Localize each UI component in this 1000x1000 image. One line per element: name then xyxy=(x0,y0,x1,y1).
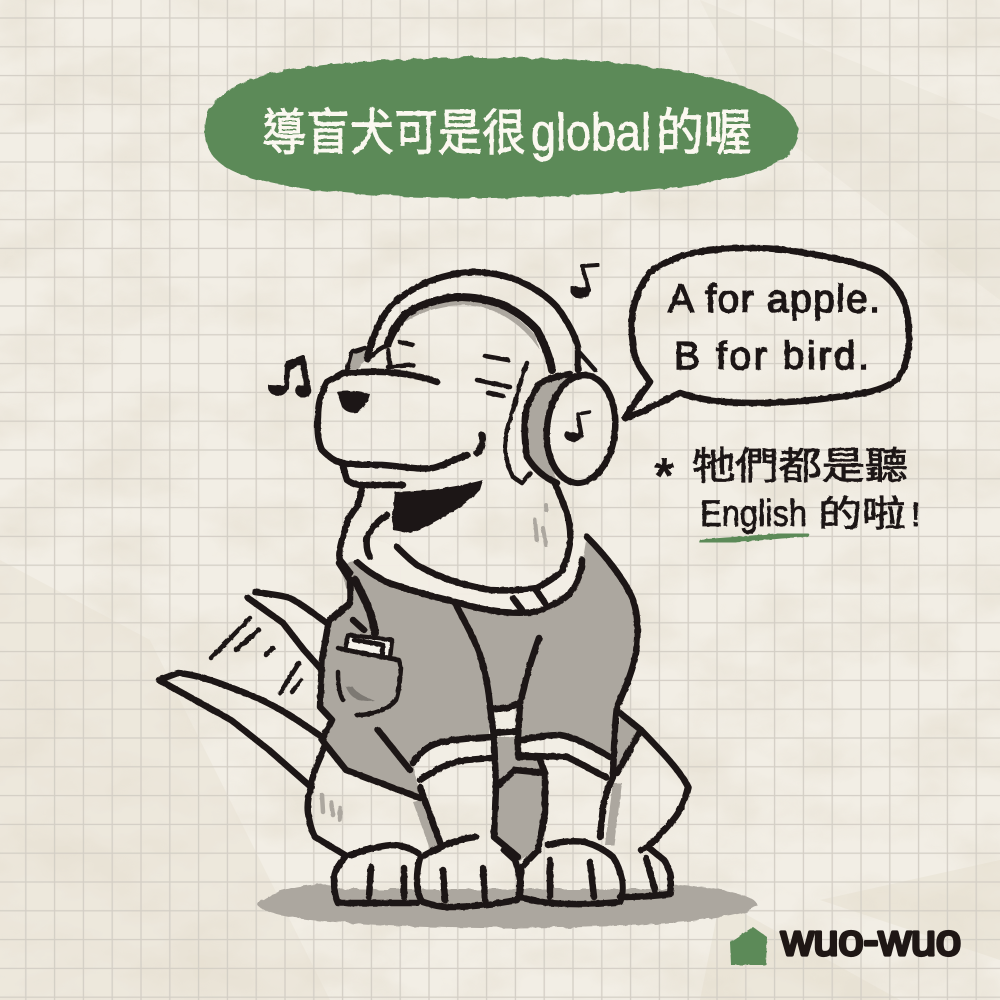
headband shade xyxy=(400,298,540,350)
hip shading marks xyxy=(322,795,340,820)
collar xyxy=(357,515,582,613)
tail xyxy=(159,592,327,787)
floppy ear xyxy=(505,363,530,483)
sweater fill xyxy=(320,535,640,862)
logo house icon xyxy=(730,927,767,965)
ground shadow xyxy=(258,884,757,928)
nose xyxy=(337,391,370,413)
dog illustration xyxy=(159,272,688,907)
hips and legs xyxy=(308,713,688,855)
bubble outline xyxy=(625,248,909,418)
bubble text line 1: A for apple. xyxy=(668,278,880,321)
paws xyxy=(334,837,671,907)
tail motion lines xyxy=(211,618,301,693)
eyes and brows xyxy=(388,342,510,396)
logo wordmark: wuo-wuo xyxy=(780,916,961,965)
note: left double xyxy=(270,357,309,395)
title text: 的喔 xyxy=(656,105,752,161)
note on cup xyxy=(566,412,590,440)
note line 2: English xyxy=(700,493,807,534)
music notes xyxy=(270,265,598,395)
head outline xyxy=(318,372,482,485)
green brush blob xyxy=(205,57,798,198)
mouth xyxy=(392,480,483,533)
neck marks xyxy=(535,505,546,545)
neck and mouth xyxy=(339,483,570,573)
speech bubble xyxy=(625,248,909,418)
note line 2: 的啦 xyxy=(818,493,906,534)
title banner xyxy=(205,57,798,198)
sweater outlines xyxy=(320,537,638,867)
green underline xyxy=(702,534,806,542)
note line 1: 牠們都是聽 xyxy=(692,446,908,488)
headband xyxy=(367,272,595,370)
left ear cup behind head xyxy=(347,348,367,370)
music player pocket xyxy=(338,635,401,715)
note line 2: ! xyxy=(911,496,920,534)
note: top right xyxy=(572,265,598,297)
headphone cable xyxy=(353,580,375,633)
title text: 導盲犬可是很 xyxy=(262,105,526,161)
side note xyxy=(654,446,920,542)
ear cup xyxy=(525,372,620,486)
bubble text line 2: B for bird. xyxy=(674,335,869,378)
asterisk: * xyxy=(654,448,675,506)
title text: global xyxy=(531,104,651,162)
logo xyxy=(730,916,961,965)
collar and cuffs paper fill xyxy=(357,535,587,612)
